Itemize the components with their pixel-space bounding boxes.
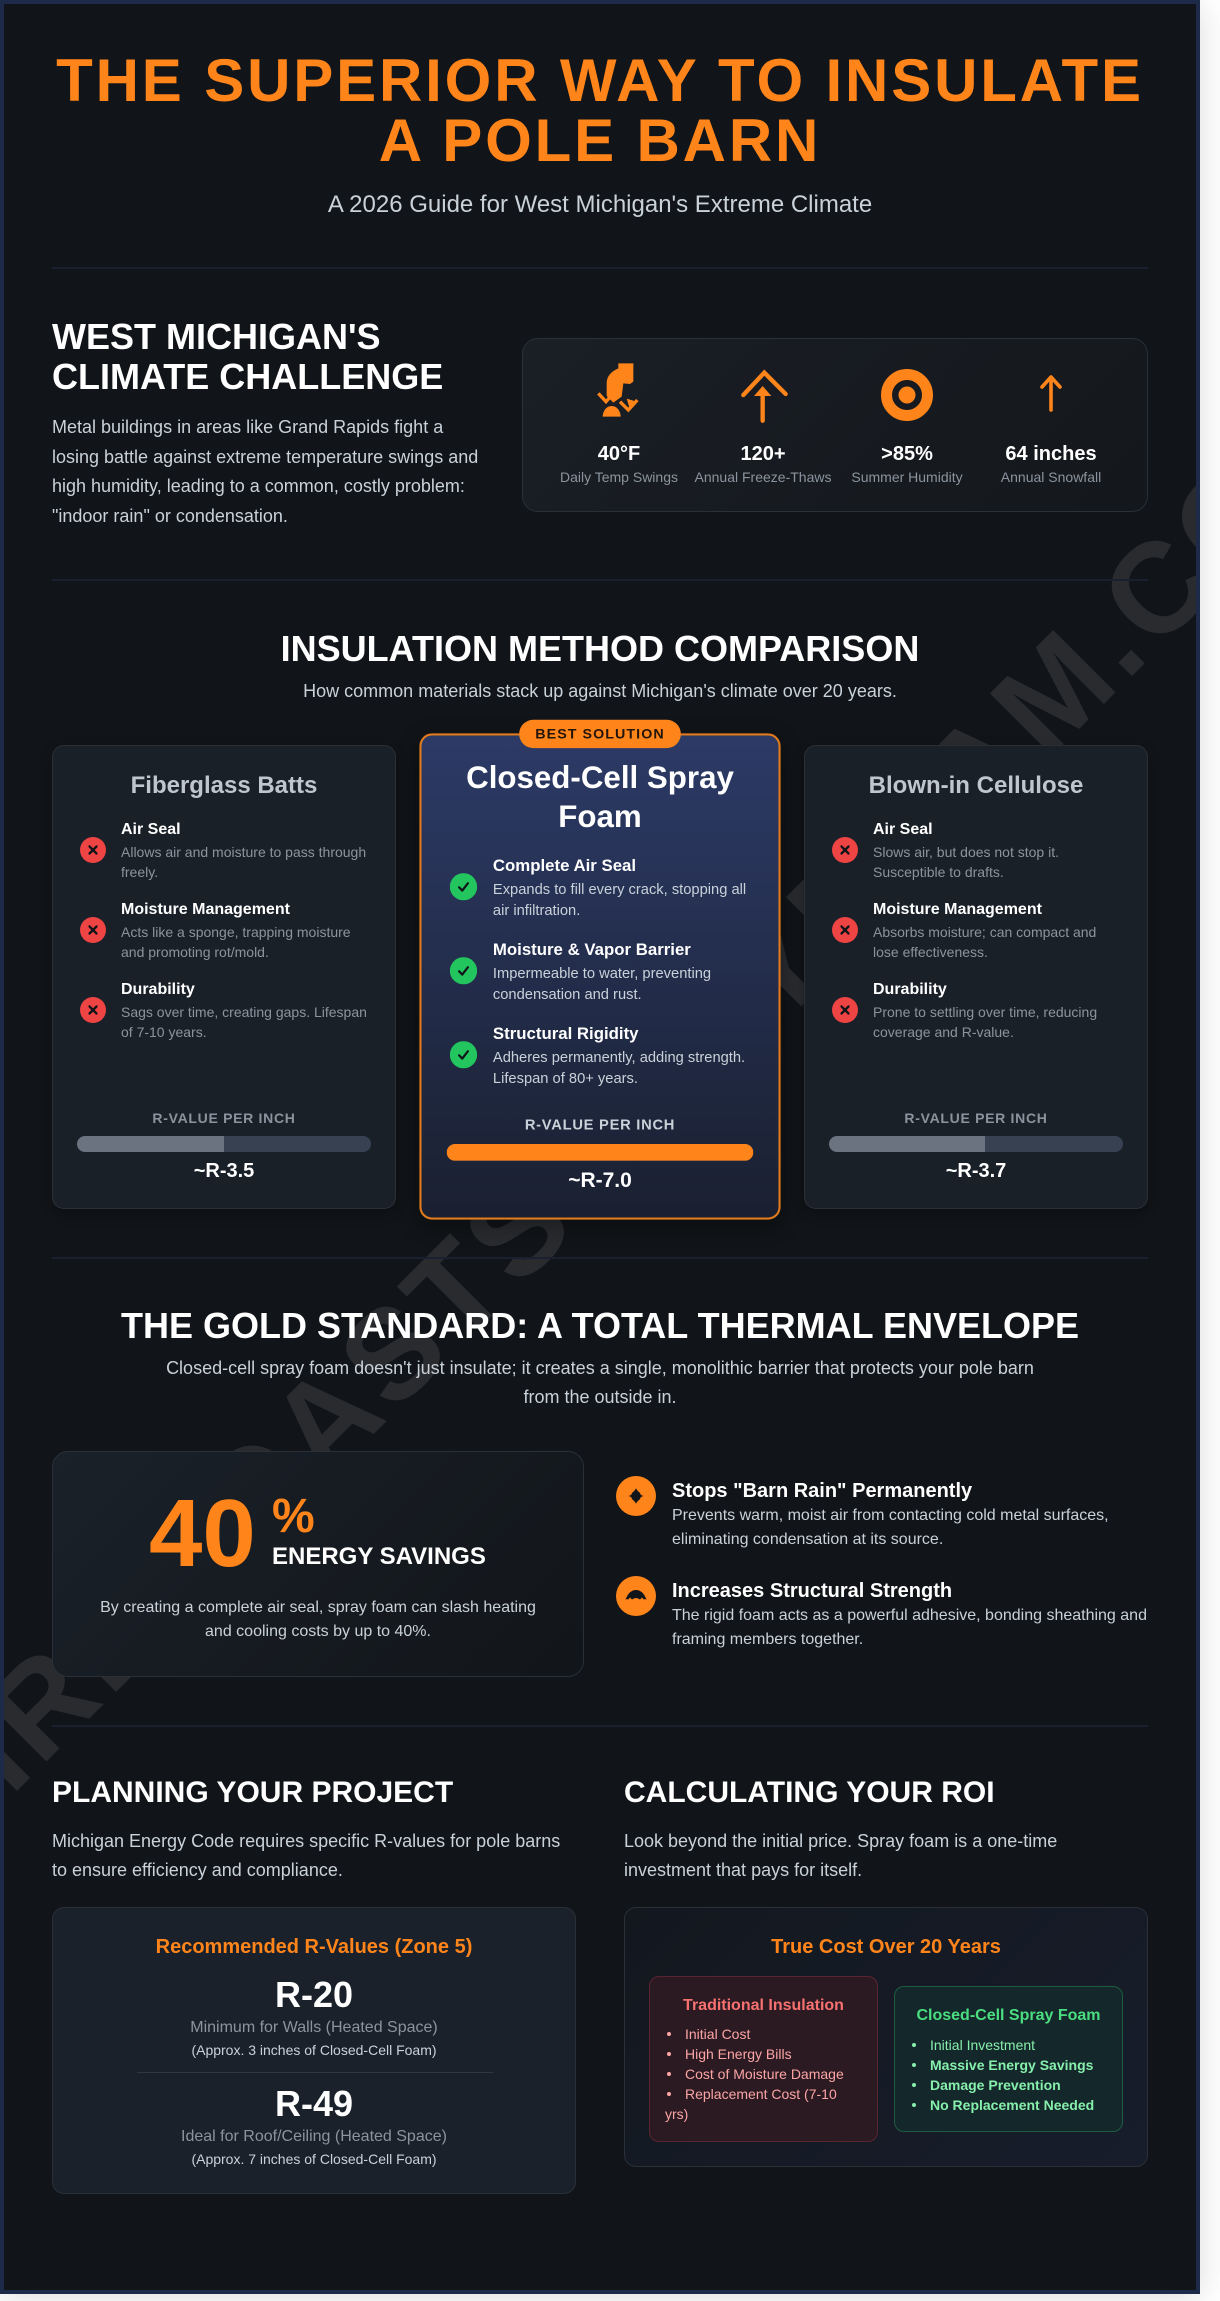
badge: best solution: BEST SOLUTION	[535, 726, 665, 742]
icon: freeze-thaw arrow	[741, 370, 788, 423]
benefit: structural strength	[616, 1576, 1148, 1656]
icon: cross	[832, 997, 858, 1023]
icon: cross	[80, 917, 106, 943]
feature: durability: Prone to settling over time, reducing	[873, 1004, 1097, 1020]
climate paragraph: Metal buildings in areas like Grand Rapids fight a	[52, 417, 443, 437]
spray foam title	[466, 761, 734, 834]
icon: cross	[80, 837, 106, 863]
benefit text: Prevents warm, moist air from contacting cold metal surfaces,	[672, 1507, 1109, 1524]
roi heading: CALCULATING YOUR ROI	[624, 1776, 995, 1809]
feature: air seal: Susceptible to drafts.	[873, 864, 1004, 880]
climate paragraph: "indoor rain" or condensation.	[52, 506, 288, 526]
r-value number: ~R-3.7	[946, 1160, 1006, 1182]
panel: true cost	[624, 1907, 1148, 2167]
stat: daily temp swings: 40°F	[598, 443, 640, 465]
feature: structural rigidity: Structural Rigidity	[493, 1025, 639, 1043]
traditional list	[650, 2024, 876, 2124]
feature: structural rigidity: Lifespan of 80+ years.	[493, 1069, 638, 1086]
climate heading: WEST MICHIGAN'S	[52, 316, 381, 357]
stat: daily temp swings	[560, 443, 678, 485]
icon: barn rain	[616, 1476, 656, 1516]
benefit title: Increases Structural Strength	[672, 1580, 952, 1602]
panel: blown-in cellulose	[804, 745, 1148, 1209]
r-49 description: Ideal for Roof/Ceiling (Heated Space)	[181, 2128, 447, 2145]
big number 40: 40	[149, 1480, 256, 1587]
climate heading: CLIMATE CHALLENGE	[52, 356, 443, 397]
section: climate challenge text	[52, 316, 478, 526]
feature: complete air seal: air infiltration.	[493, 901, 580, 918]
traditional list: High Energy Bills	[685, 2046, 792, 2062]
fiberglass title: Fiberglass Batts	[131, 772, 317, 799]
stat: humidity: >85%	[881, 443, 933, 465]
icon: cross	[832, 917, 858, 943]
planning paragraph: to ensure efficiency and compliance.	[52, 1860, 343, 1880]
r-value label: R-VALUE PER INCH	[152, 1110, 296, 1126]
section heading: comparison	[281, 628, 919, 701]
planning paragraph	[52, 1827, 560, 1885]
planning paragraph: Michigan Energy Code requires specific R-values for pole barns	[52, 1831, 560, 1851]
feature: complete air seal	[450, 857, 746, 918]
climate paragraph: losing battle against extreme temperature swings and	[52, 447, 478, 467]
r-20 description: Minimum for Walls (Heated Space)	[190, 2019, 438, 2036]
spray foam cost list: No Replacement Needed	[930, 2097, 1094, 2113]
stat: freeze-thaws: Annual Freeze-Thaws	[695, 469, 831, 485]
feature: durability	[80, 981, 367, 1040]
stat: snowfall: 64 inches	[1005, 443, 1097, 465]
icon: check	[450, 1041, 478, 1068]
percent sign: %	[272, 1490, 315, 1543]
feature: air seal: Allows air and moisture to pass through	[121, 844, 366, 860]
feature: moisture and vapor barrier: Impermeable to water, preventing	[493, 964, 711, 981]
feature: durability: of 7-10 years.	[121, 1024, 207, 1040]
feature: complete air seal: Complete Air Seal	[493, 857, 636, 875]
traditional title: Traditional Insulation	[683, 1997, 844, 2014]
spray foam cost list: Initial Investment	[930, 2037, 1035, 2053]
benefit title: Stops "Barn Rain" Permanently	[672, 1480, 972, 1502]
energy savings description: By creating a complete air seal, spray foam can slash heating	[100, 1599, 536, 1616]
feature: air seal: Slows air, but does not stop it.	[873, 844, 1059, 860]
r-value bar	[447, 1144, 753, 1161]
spray foam title: Closed-Cell Spray	[466, 761, 734, 795]
section: calculating your roi	[624, 1775, 1148, 2170]
r-49 foam note: (Approx. 7 inches of Closed-Cell Foam)	[191, 2151, 437, 2167]
gold standard title: THE GOLD STANDARD: A TOTAL THERMAL ENVELOPE	[121, 1305, 1079, 1346]
roi paragraph	[624, 1827, 1057, 1885]
traditional list: Replacement Cost (7-10	[685, 2086, 837, 2102]
icon: structural dome	[616, 1576, 656, 1616]
title	[56, 47, 1144, 174]
spray foam cost title: Closed-Cell Spray Foam	[916, 2007, 1101, 2024]
benefit text: The rigid foam acts as a powerful adhesive, bonding sheathing and	[672, 1607, 1147, 1624]
feature: moisture management: and promoting rot/mold.	[121, 944, 269, 960]
panel: fiberglass batts	[52, 745, 396, 1209]
feature: moisture management	[832, 901, 1096, 960]
r-value label: R-VALUE PER INCH	[904, 1110, 1048, 1126]
title: A POLE BARN	[379, 107, 821, 174]
r-value number: ~R-3.5	[194, 1160, 254, 1182]
r-49: R-49	[275, 2083, 353, 2124]
feature: moisture management: lose effectiveness.	[873, 944, 988, 960]
benefit text: framing members together.	[672, 1631, 863, 1648]
spray foam cost list: Damage Prevention	[930, 2077, 1061, 2093]
panel: climate stats	[522, 338, 1148, 512]
feature: moisture management: Moisture Management	[873, 901, 1042, 918]
comparison subtitle: How common materials stack up against Michigan's climate over 20 years.	[303, 681, 897, 701]
traditional list: yrs)	[665, 2106, 688, 2122]
feature: moisture and vapor barrier: condensation and rust.	[493, 985, 642, 1002]
stat: daily temp swings: Daily Temp Swings	[560, 469, 678, 485]
roi paragraph: investment that pays for itself.	[624, 1860, 862, 1880]
feature: air seal: Air Seal	[121, 821, 181, 838]
r-value label: R-VALUE PER INCH	[525, 1116, 675, 1132]
energy savings label: ENERGY SAVINGS	[272, 1543, 486, 1570]
title: THE SUPERIOR WAY TO INSULATE	[56, 47, 1144, 114]
traditional insulation box	[649, 1976, 878, 2142]
r-20: R-20	[275, 1974, 353, 2015]
stat: snowfall: Annual Snowfall	[1001, 469, 1101, 485]
climate paragraph	[52, 417, 478, 526]
icon: humidity target	[881, 369, 933, 421]
gold standard subtitle: Closed-cell spray foam doesn't just insulate; it creates a single, monolithic barrier that protects your pole barn	[166, 1358, 1034, 1378]
gold standard subtitle: from the outside in.	[523, 1387, 677, 1407]
r-value number: ~R-7.0	[568, 1169, 632, 1192]
stat: freeze-thaws: 120+	[740, 443, 786, 465]
icon: check	[450, 873, 478, 900]
icon: snowfall arrow	[1040, 375, 1062, 412]
feature: durability	[832, 981, 1097, 1040]
icon: check	[450, 957, 478, 984]
gold standard subtitle	[166, 1358, 1034, 1407]
spray foam title: Foam	[558, 799, 642, 834]
icon: cross	[832, 837, 858, 863]
panel: recommended r-values	[52, 1907, 576, 2194]
energy savings description: and cooling costs by up to 40%.	[205, 1623, 431, 1640]
feature: complete air seal: Expands to fill every crack, stopping all	[493, 880, 746, 897]
cellulose title: Blown-in Cellulose	[869, 772, 1083, 799]
icon: temperature swings	[597, 363, 638, 417]
feature: structural rigidity	[450, 1025, 745, 1086]
stat: freeze-thaws	[694, 443, 831, 485]
section heading: gold standard	[121, 1305, 1079, 1407]
header	[56, 47, 1144, 218]
traditional list: Cost of Moisture Damage	[685, 2066, 844, 2082]
feature: moisture and vapor barrier: Moisture & Vapor Barrier	[493, 941, 691, 959]
r-value bar	[829, 1136, 1123, 1152]
feature: air seal	[80, 821, 366, 880]
feature: durability: Sags over time, creating gaps. Lifespan	[121, 1004, 367, 1020]
comparison title: INSULATION METHOD COMPARISON	[281, 628, 919, 669]
planning heading: PLANNING YOUR PROJECT	[52, 1776, 453, 1809]
roi paragraph: Look beyond the initial price. Spray foam is a one-time	[624, 1831, 1057, 1851]
feature: air seal	[832, 821, 1059, 880]
feature: moisture and vapor barrier	[450, 941, 711, 1002]
spray foam cost list: Massive Energy Savings	[930, 2057, 1093, 2073]
energy savings description	[100, 1599, 536, 1640]
climate heading	[52, 316, 443, 397]
climate paragraph: high humidity, leading to a common, costly problem:	[52, 476, 465, 496]
stat: snowfall	[1000, 443, 1101, 485]
section: planning your project	[52, 1775, 576, 2195]
feature: structural rigidity: Adheres permanently, adding strength.	[493, 1048, 745, 1065]
stat: humidity: Summer Humidity	[851, 469, 963, 485]
feature: moisture management: Absorbs moisture; can compact and	[873, 924, 1096, 940]
r-value bar	[77, 1136, 371, 1152]
stat: humidity	[851, 443, 963, 485]
feature: durability: Durability	[873, 981, 947, 998]
icon: cross	[80, 997, 106, 1023]
feature: moisture management	[80, 901, 351, 960]
r-20 foam note: (Approx. 3 inches of Closed-Cell Foam)	[191, 2042, 437, 2058]
subtitle: A 2026 Guide for West Michigan's Extreme Climate	[328, 191, 872, 218]
feature: moisture management: Acts like a sponge, trapping moisture	[121, 924, 351, 940]
feature: durability: Durability	[121, 981, 195, 998]
feature: moisture management: Moisture Management	[121, 901, 290, 918]
true cost title: True Cost Over 20 Years	[771, 1936, 1001, 1958]
feature: durability: coverage and R-value.	[873, 1024, 1014, 1040]
panel: closed-cell spray foam	[419, 733, 781, 1220]
panel: energy savings	[52, 1451, 584, 1677]
feature: air seal: Air Seal	[873, 821, 933, 838]
benefit text	[672, 1604, 1147, 1652]
feature: air seal: freely.	[121, 864, 158, 880]
traditional list: Initial Cost	[685, 2026, 750, 2042]
spray foam cost box	[894, 1986, 1123, 2132]
spray foam cost list	[895, 2035, 1121, 2115]
benefit text: eliminating condensation at its source.	[672, 1531, 943, 1548]
benefit text	[672, 1507, 1109, 1548]
benefit: stops barn rain	[616, 1476, 1109, 1548]
r-values title: Recommended R-Values (Zone 5)	[156, 1936, 472, 1958]
